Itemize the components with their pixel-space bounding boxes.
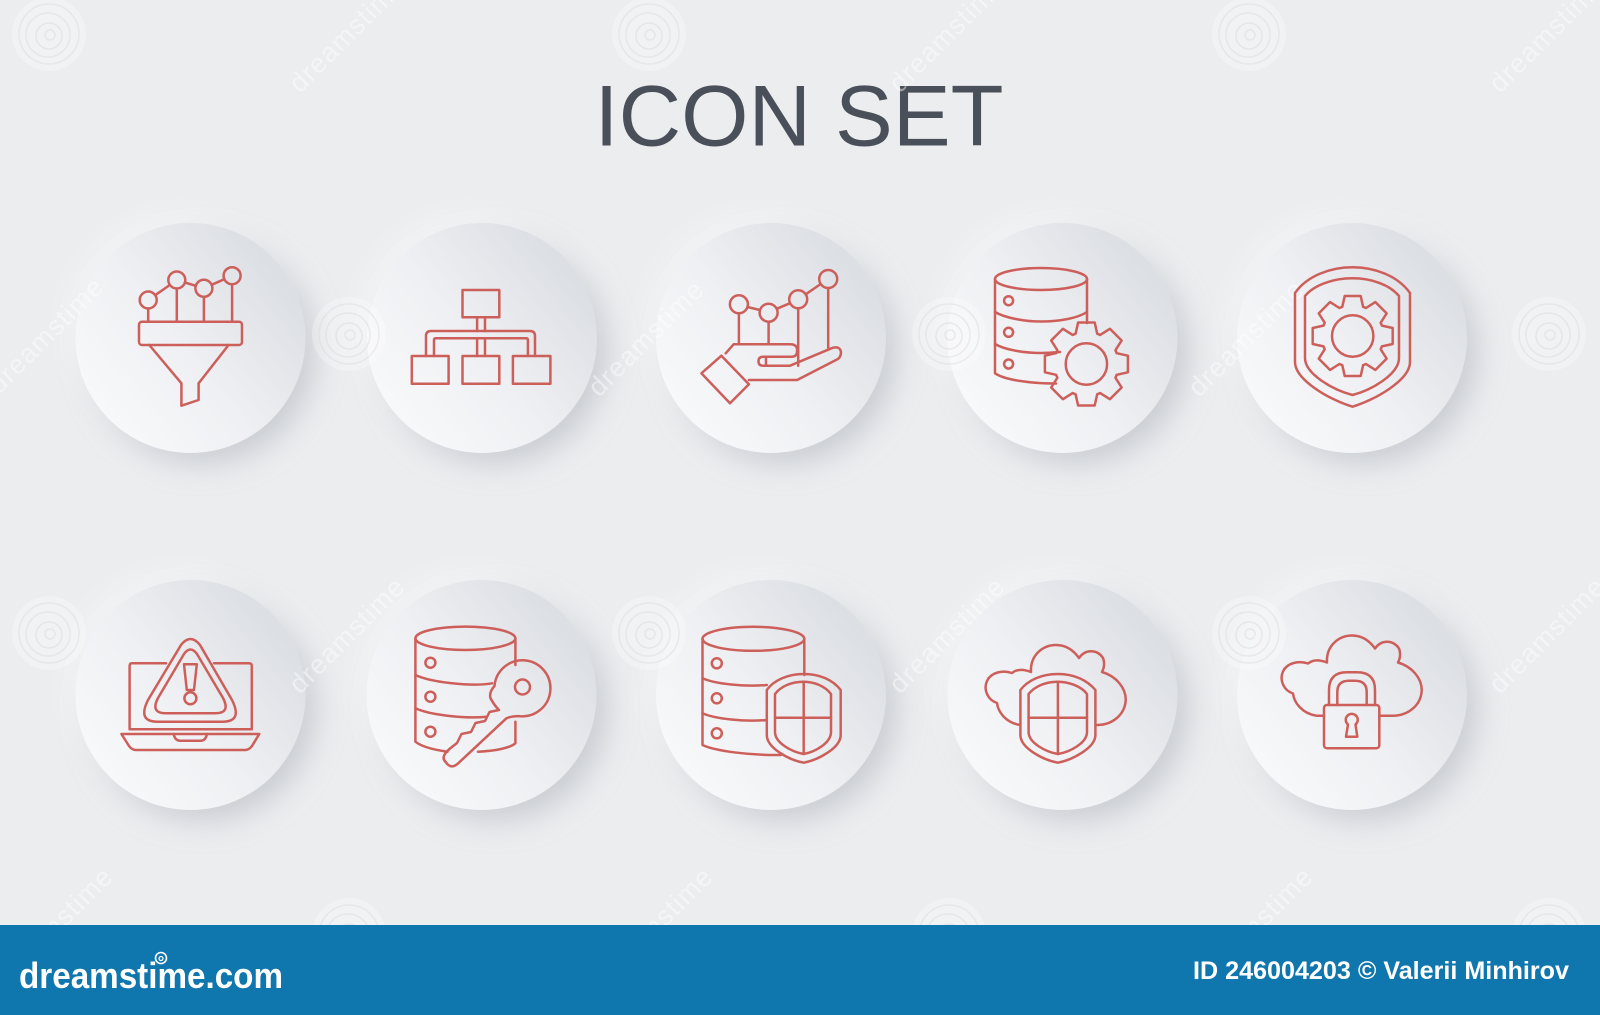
image id and author credit: ID 246004203 © Valerii Minhirov <box>1193 957 1569 985</box>
panel: hand chart button <box>647 214 896 463</box>
brand logo text: dreamstime.com <box>19 955 283 996</box>
watermark words: dreamstime <box>1191 861 1319 989</box>
panel: shield gear button <box>1228 214 1477 463</box>
watermark words: dreamstime <box>582 274 710 402</box>
panel: cloud lock button <box>1228 571 1477 820</box>
panel: laptop warning button <box>66 571 315 820</box>
watermark words: dreamstime <box>1182 274 1310 402</box>
watermark words: dreamstime <box>591 861 719 989</box>
title: ICON SET <box>595 68 1003 164</box>
footer banner <box>0 925 1600 1015</box>
icon: database with gear <box>995 268 1128 406</box>
panel: funnel button <box>66 214 315 463</box>
panel: database key button <box>358 571 607 820</box>
panel: database gear button <box>939 214 1188 463</box>
icon: cloud with shield <box>986 645 1126 763</box>
icon: laptop with warning <box>121 639 259 750</box>
watermark words: dreamstime <box>283 571 411 699</box>
icon: database with shield <box>702 627 841 763</box>
icon: cloud with padlock <box>1282 636 1422 748</box>
icon: hand holding chart <box>701 270 841 403</box>
icon: shield with gear <box>1295 267 1410 407</box>
icon: database with key <box>415 627 550 766</box>
icon: funnel with chart <box>139 267 242 406</box>
panel: cloud shield button <box>939 571 1188 820</box>
icon: hierarchy diagram <box>412 290 550 384</box>
watermark words: dreamstime <box>883 571 1011 699</box>
panel: database shield button <box>647 571 896 820</box>
panel: hierarchy button <box>358 214 607 463</box>
